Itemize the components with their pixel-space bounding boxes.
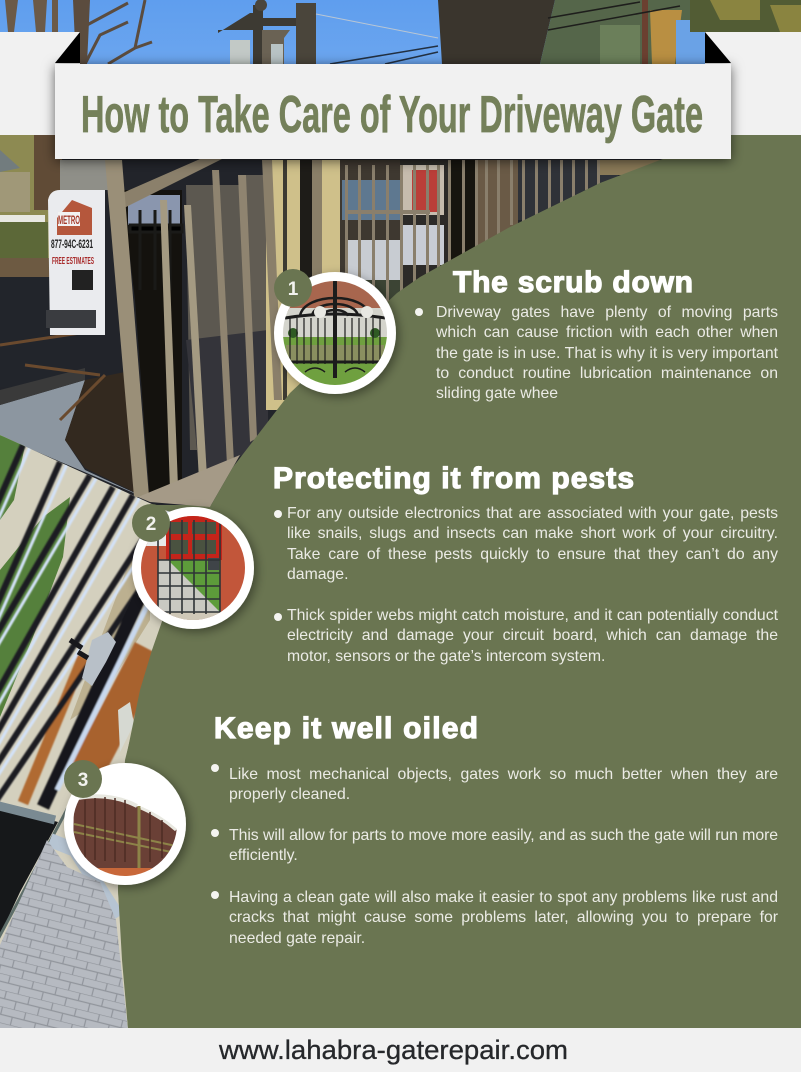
text: oiled paragraph 3 <box>229 889 778 947</box>
heading: Protecting it from pests: Protecting it from pests <box>273 462 634 495</box>
heading: Keep it well oiled: Keep it well oiled <box>214 712 478 745</box>
bullet: pests 2 <box>274 613 282 621</box>
badge 1: 1 <box>288 279 299 300</box>
bullet: oiled 1 <box>211 764 219 772</box>
text: oiled paragraph 1 <box>229 766 778 803</box>
text: oiled paragraph 3: needed gate repair. <box>229 930 365 947</box>
section 2 photo medallion <box>132 504 254 629</box>
text: scrub down paragraph: sliding gate whee <box>436 385 558 402</box>
badge 3: 3 <box>78 770 88 791</box>
text: pests paragraph 2 <box>287 607 778 665</box>
text: scrub down paragraph: Driveway gates have plenty of moving parts <box>436 304 778 321</box>
text: oiled paragraph 2: This will allow for parts to move more easily, and as such the gate will run more <box>229 827 778 844</box>
footer url: www.lahabra-gaterepair.com <box>218 1035 568 1065</box>
heading: The scrub down: The scrub down <box>453 266 693 299</box>
text: pests paragraph 2: Thick spider webs might catch moisture, and it can potentially conduct <box>287 607 778 624</box>
badge 2: 2 <box>146 514 156 535</box>
middle photo: iron fence, van and road <box>0 135 801 507</box>
top photo: sky, lamp and trees <box>0 0 801 140</box>
bullet: oiled 3 <box>211 891 219 899</box>
lower photo: angled gate and paving <box>0 435 170 1028</box>
title ribbon <box>0 32 801 159</box>
text: oiled paragraph 3: cracks that might cause some problems later, allowing you to prepare for <box>229 909 778 926</box>
text: oiled paragraph 1: properly cleaned. <box>229 786 350 803</box>
text: pests paragraph 1: damage. <box>287 566 348 583</box>
bullet: oiled 2 <box>211 829 219 837</box>
text: scrub down paragraph: which can cause friction with each other when <box>436 324 778 341</box>
text: oiled paragraph 1: Like most mechanical objects, gates work so much better when they are <box>229 766 778 783</box>
text: pests paragraph 1: Take care of these pests quickly to ensure that they can’t do any <box>287 546 778 563</box>
text: scrub down paragraph: the gate is in use. That is why it is very important <box>436 345 778 362</box>
text: pests paragraph 2: motor, sensors or the gate’s intercom system. <box>287 648 605 665</box>
text: oiled paragraph 3: Having a clean gate will also make it easier to spot any problems like rust and <box>229 889 778 906</box>
section 3 photo medallion <box>64 760 186 885</box>
section 1 photo medallion <box>274 269 396 394</box>
text: pests paragraph 2: electricity and damage your circuit board, which can damage the <box>287 627 778 644</box>
middle photo: iron fence, van and road: METRO <box>58 213 80 227</box>
text: scrub down paragraph <box>436 304 778 402</box>
middle photo: iron fence, van and road: 877-94C-6231 <box>51 237 93 251</box>
text: pests paragraph 1 <box>287 505 778 583</box>
footer band <box>0 1028 801 1072</box>
bullet: scrub down <box>415 308 423 316</box>
text: scrub down paragraph: to conduct routine lubrication maintenance on <box>436 365 778 382</box>
text: oiled paragraph 2: efficiently. <box>229 847 298 864</box>
middle photo: iron fence, van and road: FREE ESTIMATES <box>52 256 94 267</box>
bullet: pests 1 <box>274 510 282 518</box>
text: oiled paragraph 2 <box>229 827 778 864</box>
green background panel <box>118 135 801 1028</box>
text: pests paragraph 1: For any outside electronics that are associated with your gate, pests <box>287 505 778 522</box>
text: pests paragraph 1: like snails, slugs and insects can make short work of your circuitry. <box>287 525 778 542</box>
